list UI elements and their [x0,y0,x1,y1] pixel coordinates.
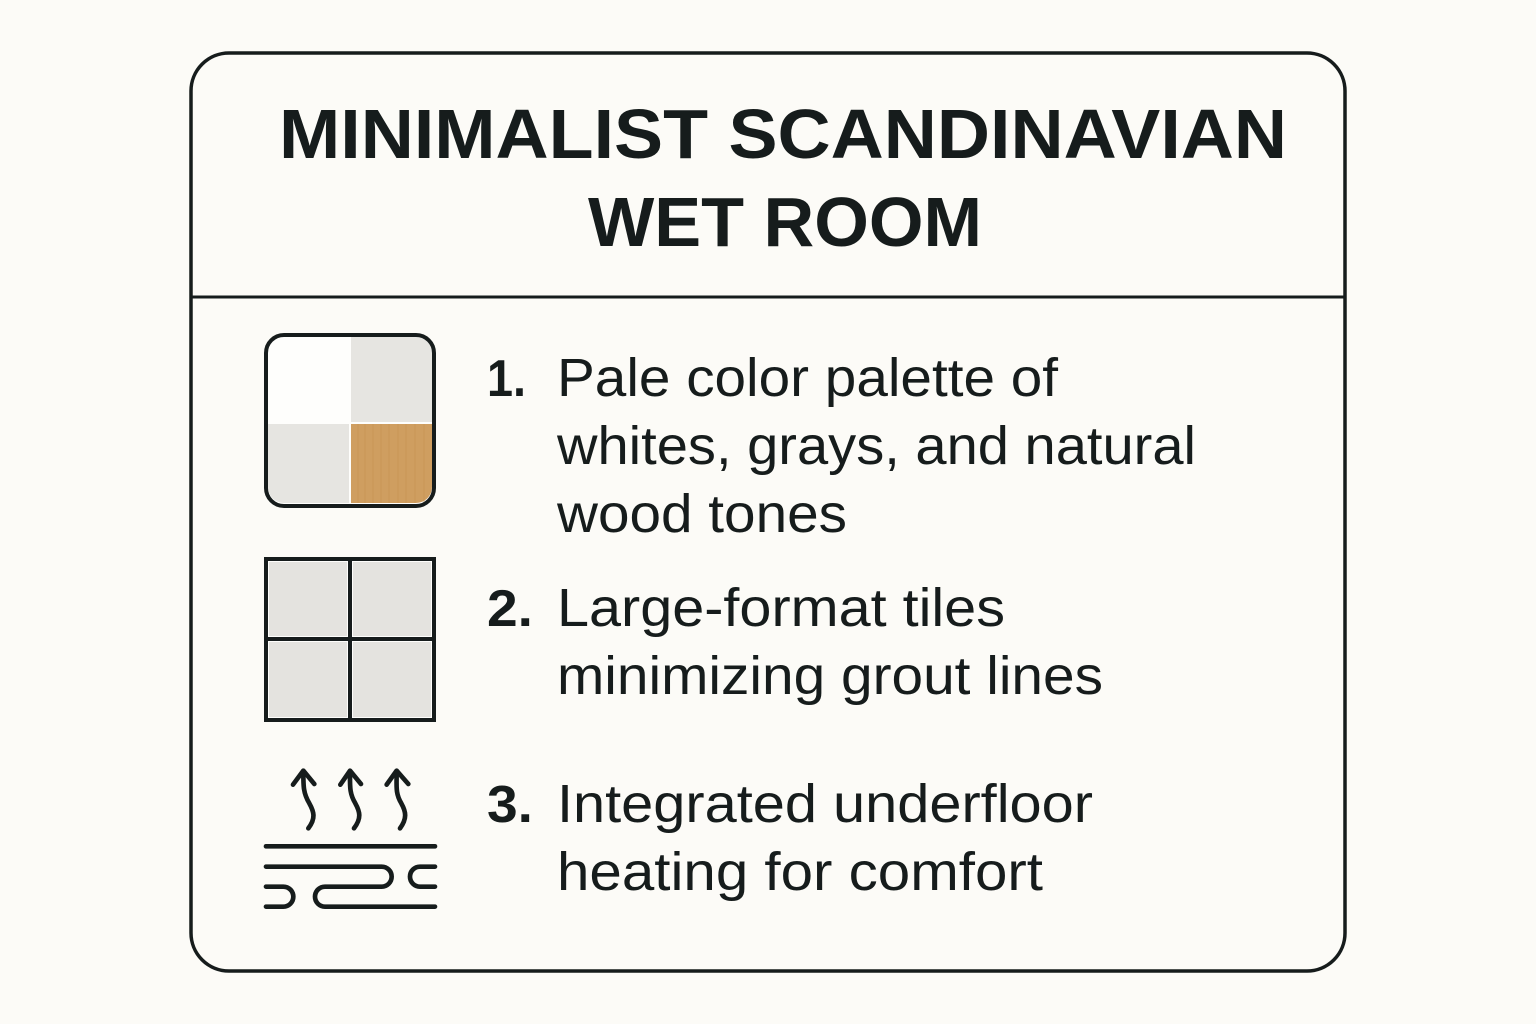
item 2 text: minimizing grout lines [557,646,1103,706]
item 3 text: heating for comfort [557,842,1043,902]
icon: colour palette swatch [266,335,434,506]
item 3 text: 3. [487,776,533,834]
panel: main card [191,53,1345,971]
item 1 text: whites, grays, and natural [556,416,1196,476]
icon: underfloor heating [266,771,435,907]
item 3 text [487,774,1093,902]
item 2 text: 2. [487,580,533,638]
item 2 text [487,578,1103,706]
item 2 text: Large-format tiles [557,578,1005,638]
item 3 text: Integrated underfloor [557,774,1093,834]
title: WET ROOM [588,183,982,261]
title [279,95,1287,261]
item 1 text: 1. [487,350,526,408]
title: MINIMALIST SCANDINAVIAN [279,95,1287,173]
icon: large-format tile grid [266,559,434,720]
item 1 text: Pale color palette of [557,348,1059,408]
item 1 text [487,348,1196,544]
item 1 text: wood tones [556,484,847,544]
